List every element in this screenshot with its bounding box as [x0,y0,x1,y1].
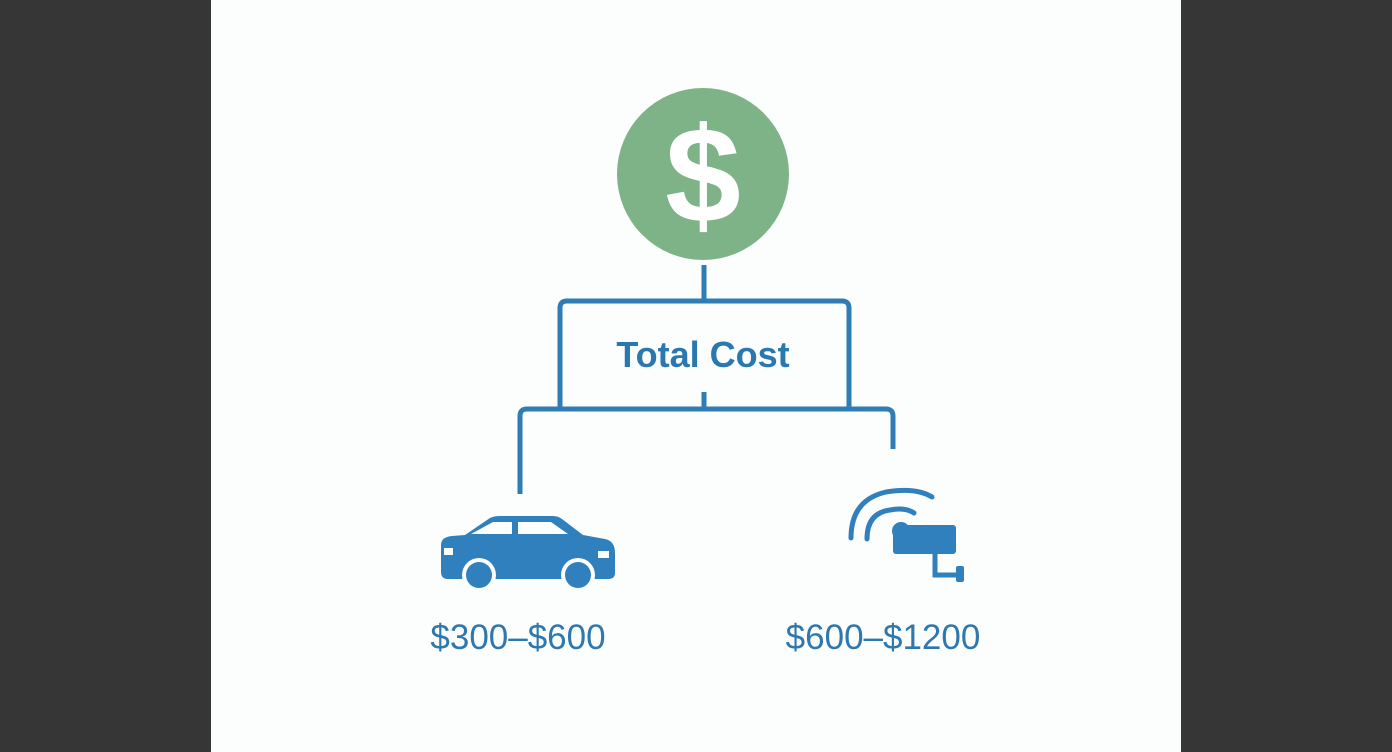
panel: white infographic area [211,0,1181,752]
icon: car [441,516,615,592]
connector: branch bracket [520,392,893,494]
connector: circle to box [702,265,706,301]
icon: green dollar circle: $ [665,99,741,251]
label: camera cost: $600–$1200 [786,618,980,657]
box: total cost [560,301,849,408]
label: car cost: $300–$600 [430,618,606,657]
icon: green dollar circle [617,88,789,260]
icon: security camera with signal [851,490,964,582]
box: total cost: Total Cost [616,334,790,375]
